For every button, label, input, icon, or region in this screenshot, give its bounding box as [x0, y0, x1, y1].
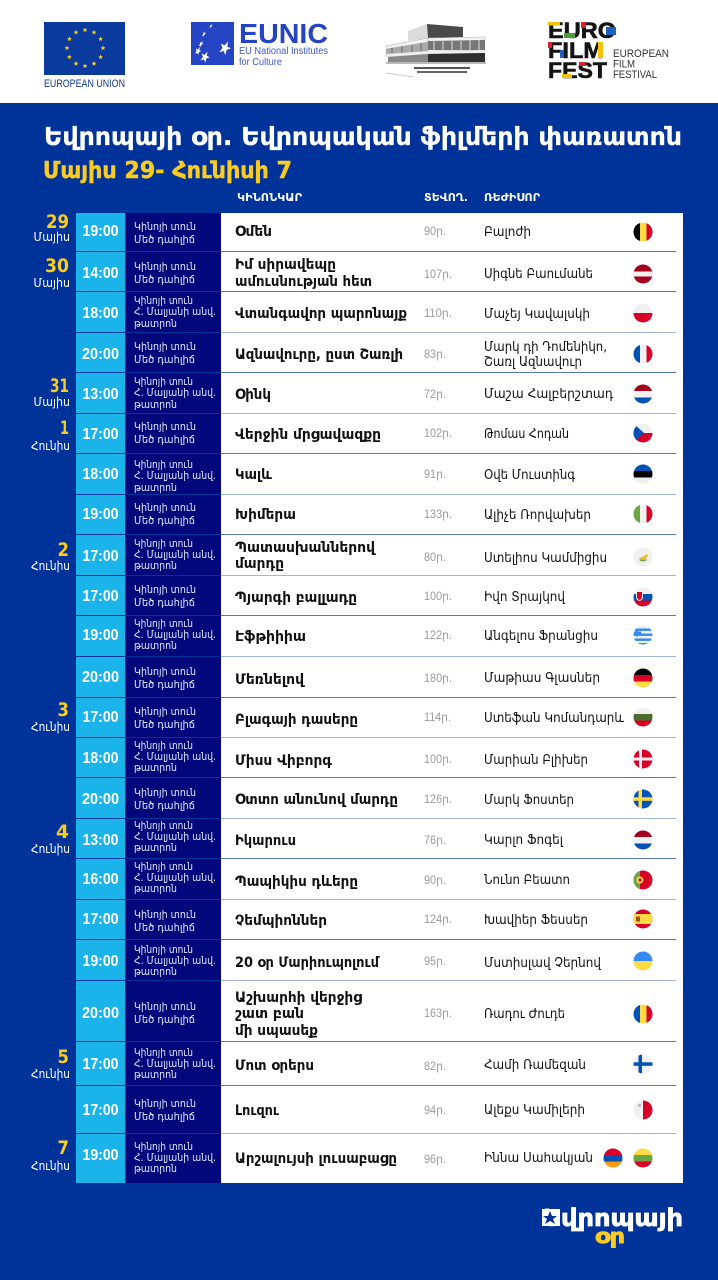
- row 1: [76, 213, 654, 251]
- row 6: Կինոյի տուն: [134, 420, 196, 433]
- date: 1 June: [31, 417, 70, 453]
- logo: European Union: EUROPEAN UNION: [44, 78, 125, 90]
- row 13: [76, 698, 653, 737]
- row 14: Մարիան Բլիխեր: [484, 753, 588, 768]
- flag: Spain: [633, 909, 653, 929]
- table column headers: ԿԻՆՈՆԿԱՐ: [237, 191, 303, 204]
- row 5: 13:00: [82, 386, 119, 403]
- logo: EUNIC: EU National Institutes: [239, 46, 328, 57]
- footer logo: Europe Day: Ե: [543, 1204, 560, 1232]
- flag: Germany: [634, 668, 652, 688]
- date: 30 May: Մայիս: [34, 275, 70, 290]
- date: 31 May: Մայիս: [34, 394, 70, 409]
- row 3: 18:00: [82, 305, 119, 322]
- row 18: Չեմպիոններ: [235, 913, 327, 929]
- row 21: թատրոն: [134, 1068, 177, 1081]
- row 20: շատ բան: [235, 1006, 304, 1022]
- table column headers: ՌԵԺԻՍՈՐ: [484, 191, 541, 204]
- row 17: 90ր.: [424, 875, 446, 887]
- row 3: [76, 292, 653, 332]
- date: 3 June: Հունիս: [31, 719, 70, 734]
- flag: Sweden: [633, 789, 653, 809]
- date: 4 June: Հունիս: [31, 841, 70, 856]
- date: 2 June: 2: [58, 539, 69, 561]
- row 12: Մեռնելով: [235, 672, 305, 688]
- row 2: Կինոյի տուն: [134, 260, 196, 273]
- footer logo: Europe Day: վրոպայի: [561, 1204, 683, 1232]
- row 12: 20:00: [82, 669, 119, 686]
- row 11: Էֆթիիիա: [235, 629, 306, 645]
- row 19: Մստիսլավ Չերնով: [484, 956, 602, 971]
- row 21: Կինոյի տուն: [134, 1046, 193, 1059]
- row 16: Կարլո Ֆոգել: [484, 833, 563, 848]
- table column headers: ՏԵՎՈՂ.: [424, 191, 468, 204]
- row 20: 163ր.: [424, 1008, 452, 1020]
- flag: Greece: [634, 626, 652, 644]
- date: 29 May: Մայիս: [34, 229, 70, 244]
- row 14: Հ. Մալյանի անվ.: [134, 750, 216, 763]
- row 20: Ռադու Ժուդե: [484, 1007, 565, 1022]
- row 17: Կինոյի տուն: [134, 860, 193, 873]
- row 16: Իկարուս: [235, 833, 296, 849]
- date: 3 June: [31, 699, 70, 734]
- flag: Romania: [633, 1004, 654, 1024]
- row 19: 95ր.: [424, 956, 446, 968]
- row 12: Մաթիաս Գլասներ: [484, 671, 600, 686]
- row 17: Հ. Մալյանի անվ.: [134, 871, 216, 884]
- date: 3 June: 3: [58, 699, 69, 721]
- row 9: Կինոյի տուն: [134, 537, 193, 550]
- row 2: 14:00: [82, 265, 119, 282]
- subtitle: dates: Մայիս 29- Հունիսի 7: [43, 158, 292, 184]
- row 9: 17:00: [82, 548, 119, 565]
- row 21: 82ր.: [424, 1061, 446, 1073]
- row 8: Խիմերա: [235, 507, 296, 523]
- flag: Netherlands: [634, 384, 652, 404]
- row 3: Մաչեյ Կավալսկի: [484, 307, 590, 322]
- date: 2 June: Հունիս: [31, 558, 70, 573]
- flag: Ukraine: [633, 951, 653, 971]
- logo: EUNIC: [191, 18, 328, 68]
- row 15: Մեծ դահլիճ: [134, 799, 195, 812]
- date: 30 May: 30: [45, 255, 69, 277]
- logo: EUNIC: EUNIC: [239, 18, 328, 49]
- row 6: 102ր.: [424, 428, 452, 440]
- row 5: Օինկ: [235, 387, 271, 403]
- row 18: Մեծ դահլիճ: [134, 921, 195, 934]
- date: 5 June: 5: [58, 1046, 69, 1068]
- row 12: Կինոյի տուն: [134, 665, 196, 678]
- row 18: 124ր.: [424, 914, 452, 926]
- row 16: Կինոյի տուն: [134, 819, 193, 832]
- row 21: Համի Ռամեզան: [484, 1058, 586, 1073]
- row 4: [76, 333, 654, 372]
- row 2: [76, 252, 653, 291]
- row 9: թատրոն: [134, 559, 177, 572]
- row 9: Ստելիոս Կամմիցիս: [484, 551, 607, 566]
- row 13: Բլագայի դասերը: [235, 712, 358, 728]
- logo: Euro Film Fest: EUROPEAN: [613, 48, 669, 60]
- row 11: Անգելոս Ֆրանցիս: [484, 629, 598, 644]
- logo: Euro Film Fest: EURO: [548, 18, 616, 43]
- row 23: թատրոն: [134, 1162, 177, 1175]
- row 10: [76, 576, 653, 615]
- row 5: Մաշա Հալբերշտադ: [484, 387, 613, 402]
- date: 2 June: [31, 539, 70, 573]
- row 5: թատրոն: [134, 398, 177, 411]
- row 9: [76, 535, 653, 575]
- row 22: Կինոյի տուն: [134, 1097, 196, 1110]
- date: 7 June: [31, 1137, 70, 1173]
- date: 31 May: 31: [50, 375, 69, 397]
- row 10: 17:00: [82, 588, 119, 605]
- logo: Euro Film Fest: [548, 18, 669, 83]
- row 11: 122ր.: [424, 630, 452, 642]
- row 21: Մոտ օրերս: [235, 1058, 314, 1074]
- flag: Slovakia: [634, 588, 652, 606]
- row 20: 20:00: [82, 1005, 119, 1022]
- row 4: 20:00: [82, 346, 119, 363]
- row 16: 76ր.: [424, 835, 446, 847]
- flag: Denmark: [633, 749, 653, 769]
- row 17: թատրոն: [134, 882, 177, 895]
- row 7: 91ր.: [424, 469, 446, 481]
- row 11: [76, 616, 653, 656]
- row 10: Իվո Տրայկով: [484, 590, 566, 605]
- date: 1 June: Հունիս: [31, 438, 70, 453]
- row 7: Կալև: [235, 467, 273, 483]
- row 15: Կինոյի տուն: [134, 786, 196, 799]
- flag: Lithuania: [633, 1148, 653, 1168]
- date: 30 May: [34, 255, 70, 290]
- footer logo: Europe Day: [542, 1204, 683, 1248]
- row 7: թատրոն: [134, 481, 177, 494]
- row 1: 90ր.: [424, 226, 446, 238]
- flag: Belgium: [634, 222, 652, 242]
- row 1: Բալոժի: [484, 225, 531, 240]
- row 4: 83ր.: [424, 349, 446, 361]
- row 16: 13:00: [82, 832, 119, 849]
- row 19: Կինոյի տուն: [134, 943, 193, 956]
- row 14: Միսս Վիբորգ: [235, 753, 332, 769]
- flag: Portugal: [633, 870, 653, 890]
- row 8: Ալիչե Ռորվախեր: [484, 508, 591, 523]
- row 8: [76, 495, 654, 534]
- row 5: 72ր.: [424, 389, 446, 401]
- logo: House of Cinema building sketch: [386, 24, 486, 77]
- row 2: Մեծ դահլիճ: [134, 273, 195, 286]
- row 19: Հ. Մալյանի անվ.: [134, 954, 216, 967]
- row 23: Իննա Սահակյան: [484, 1151, 593, 1166]
- row 13: Կինոյի տուն: [134, 705, 196, 718]
- date: 7 June: 7: [58, 1137, 69, 1159]
- flag: Armenia: [603, 1148, 623, 1168]
- row 20: Աշխարհի վերջից: [235, 990, 362, 1006]
- row 6: Վերջին մրցավազքը: [235, 427, 381, 443]
- row 22: 94ր.: [424, 1105, 446, 1117]
- row 3: Կինոյի տուն: [134, 294, 193, 307]
- row 5: Հ. Մալյանի անվ.: [134, 386, 216, 399]
- schedule table: [76, 213, 683, 1183]
- row 16: Հ. Մալյանի անվ.: [134, 830, 216, 843]
- flag: France: [634, 344, 652, 364]
- flag: Netherlands: [634, 830, 652, 850]
- date: 4 June: [31, 821, 70, 856]
- row 17: Նունո Բեատո: [484, 873, 570, 888]
- row 20: Կինոյի տուն: [134, 1000, 196, 1013]
- date: 7 June: Հունիս: [31, 1158, 70, 1173]
- row 9: 80ր.: [424, 552, 446, 564]
- row 19: 20 օր Մարիուպոլում: [235, 955, 380, 971]
- row 1: Մեծ դահլիճ: [134, 233, 195, 246]
- row 19: 19:00: [82, 953, 119, 970]
- row 10: Կինոյի տուն: [134, 583, 196, 596]
- row 4: Մեծ դահլիճ: [134, 353, 195, 366]
- flag: Estonia: [634, 464, 652, 484]
- date: 29 May: [34, 211, 70, 244]
- row 8: Մեծ դահլիճ: [134, 514, 195, 527]
- row 13: 17:00: [82, 709, 119, 726]
- row 3: Հ. Մալյանի անվ.: [134, 305, 216, 318]
- row 7: Կինոյի տուն: [134, 458, 193, 471]
- row 10: Մեծ դահլիճ: [134, 596, 195, 609]
- logo: Euro Film Fest: FILM: [548, 38, 603, 63]
- row 10: Պյարգի բալլադը: [235, 590, 357, 606]
- row 3: թատրոն: [134, 317, 177, 330]
- row 23: 96ր.: [424, 1154, 446, 1166]
- row 9: Հ. Մալյանի անվ.: [134, 548, 216, 561]
- row 17: Պապիկիս դևերը: [235, 874, 358, 890]
- flag: Italy: [634, 504, 652, 524]
- row 13: Մեծ դահլիճ: [134, 718, 195, 731]
- table column headers: [237, 191, 541, 204]
- row 8: Կինոյի տուն: [134, 501, 196, 514]
- row 23: Կինոյի տուն: [134, 1140, 193, 1153]
- row 11: թատրոն: [134, 639, 177, 652]
- date: 4 June: 4: [56, 821, 69, 843]
- row 7: Հ. Մալյանի անվ.: [134, 469, 216, 482]
- row 17: 16:00: [82, 871, 119, 888]
- date: 31 May: [34, 375, 70, 409]
- row 14: Կինոյի տուն: [134, 739, 193, 752]
- row 13: Ստեֆան Կոմանդարև: [484, 711, 624, 726]
- logo: European Union: [44, 22, 125, 90]
- row 22: 17:00: [82, 1102, 119, 1119]
- row 14: 100ր.: [424, 754, 452, 766]
- row 21: 17:00: [82, 1056, 119, 1073]
- row 21: Հ. Մալյանի անվ.: [134, 1057, 216, 1070]
- footer logo: Europe Day: օր: [595, 1224, 625, 1248]
- row 23: [76, 1134, 653, 1183]
- row 9: մարդը: [235, 556, 284, 572]
- row 7: Օվե Մուստինգ: [484, 468, 575, 483]
- row 19: [76, 940, 653, 980]
- flag: Poland: [633, 303, 653, 323]
- logo: Euro Film Fest: FILM: [613, 58, 635, 70]
- row 15: Օտտո անունով մարդը: [235, 792, 398, 808]
- logo: EUNIC: for Culture: [239, 57, 282, 68]
- row 15: Մարկ Ֆոստեր: [484, 793, 574, 808]
- date: 5 June: [31, 1046, 70, 1081]
- row 11: Կինոյի տուն: [134, 617, 193, 630]
- row 1: 19:00: [82, 223, 119, 240]
- flag: Bulgaria: [634, 708, 652, 726]
- row 17: [76, 859, 653, 899]
- row 18: Խավիեր Ֆեսսեր: [484, 913, 588, 928]
- row 11: 19:00: [82, 627, 119, 644]
- row 21: [76, 1042, 653, 1085]
- flag: Czechia: [633, 423, 653, 443]
- row 10: 100ր.: [424, 591, 452, 603]
- row 15: 20:00: [82, 791, 119, 808]
- title: Եվրոպայի օր. Եվրոպական ֆիլմերի փառատոն: [44, 122, 682, 151]
- date: 1 June: 1: [60, 417, 69, 439]
- row 22: [76, 1086, 653, 1133]
- row 23: 19:00: [82, 1147, 119, 1164]
- flag: Finland: [633, 1054, 653, 1074]
- row 14: [76, 738, 653, 777]
- table white panel: [221, 213, 683, 1183]
- row 22: Լուզու: [235, 1103, 279, 1119]
- row 2: 107ր.: [424, 269, 452, 281]
- row 4: Ազնավուրը, ըստ Շառլի: [235, 347, 403, 363]
- date: 5 June: Հունիս: [31, 1066, 70, 1081]
- row 12: Մեծ դահլիճ: [134, 678, 195, 691]
- row 12: 180ր.: [424, 673, 452, 685]
- row 5: [76, 373, 653, 413]
- flag: Malta: [633, 1100, 653, 1120]
- row 15: 126ր.: [424, 794, 452, 806]
- row 18: Կինոյի տուն: [134, 908, 196, 921]
- row 2: ամուսնության հետ: [235, 274, 372, 290]
- row 12: [76, 657, 653, 697]
- row 6: Մեծ դահլիճ: [134, 433, 195, 446]
- row 3: Վտանգավոր պարոնայք: [235, 306, 407, 322]
- row 15: [76, 778, 653, 818]
- row 6: [76, 414, 653, 453]
- date: 29 May: 29: [46, 211, 69, 233]
- row 1: Կինոյի տուն: [134, 220, 196, 233]
- row 4: Շառլ Ազնավուր: [484, 355, 582, 370]
- row 2: Սիգնե Բաումանե: [484, 267, 593, 282]
- row 23: Արշալույսի լուսաբացը: [235, 1151, 397, 1167]
- flag: Cyprus: [633, 547, 653, 567]
- row 9: Պատասխաններով: [235, 540, 376, 556]
- row 20: մի սպասեք: [235, 1023, 318, 1039]
- row 22: Ալեքս Կամիլերի: [484, 1103, 585, 1118]
- row 18: [76, 900, 653, 939]
- row 22: Մեծ դահլիճ: [134, 1110, 195, 1123]
- row 4: Կինոյի տուն: [134, 340, 196, 353]
- row 6: Թոմաս Հոդան: [484, 427, 569, 442]
- row 1: Օմեն: [235, 224, 272, 240]
- row 13: 114ր.: [424, 712, 451, 724]
- row 14: 18:00: [82, 750, 119, 767]
- row 16: թատրոն: [134, 841, 177, 854]
- row 7: 18:00: [82, 466, 119, 483]
- logo: Euro Film Fest: FESTIVAL: [613, 69, 657, 81]
- row 16: [76, 819, 653, 858]
- row 7: [76, 454, 653, 494]
- logo: Euro Film Fest: FEST: [548, 58, 608, 83]
- row 18: 17:00: [82, 911, 119, 928]
- row 8: 19:00: [82, 506, 119, 523]
- row 5: Կինոյի տուն: [134, 375, 193, 388]
- row 20: Մեծ դահլիճ: [134, 1013, 195, 1026]
- row 2: Իմ սիրավեպը: [235, 257, 336, 273]
- row 3: 110ր.: [424, 308, 452, 320]
- row 8: 133ր.: [424, 509, 452, 521]
- header band: [0, 0, 718, 103]
- row 11: Հ. Մալյանի անվ.: [134, 628, 216, 641]
- row 4: Մարկ դի Դոմենիկո,: [484, 340, 607, 355]
- row 20: [76, 981, 654, 1041]
- flag: Latvia: [633, 264, 653, 284]
- row 6: 17:00: [82, 426, 119, 443]
- row 14: թատրոն: [134, 761, 177, 774]
- row 23: Հ. Մալյանի անվ.: [134, 1151, 216, 1164]
- row 19: թատրոն: [134, 965, 177, 978]
